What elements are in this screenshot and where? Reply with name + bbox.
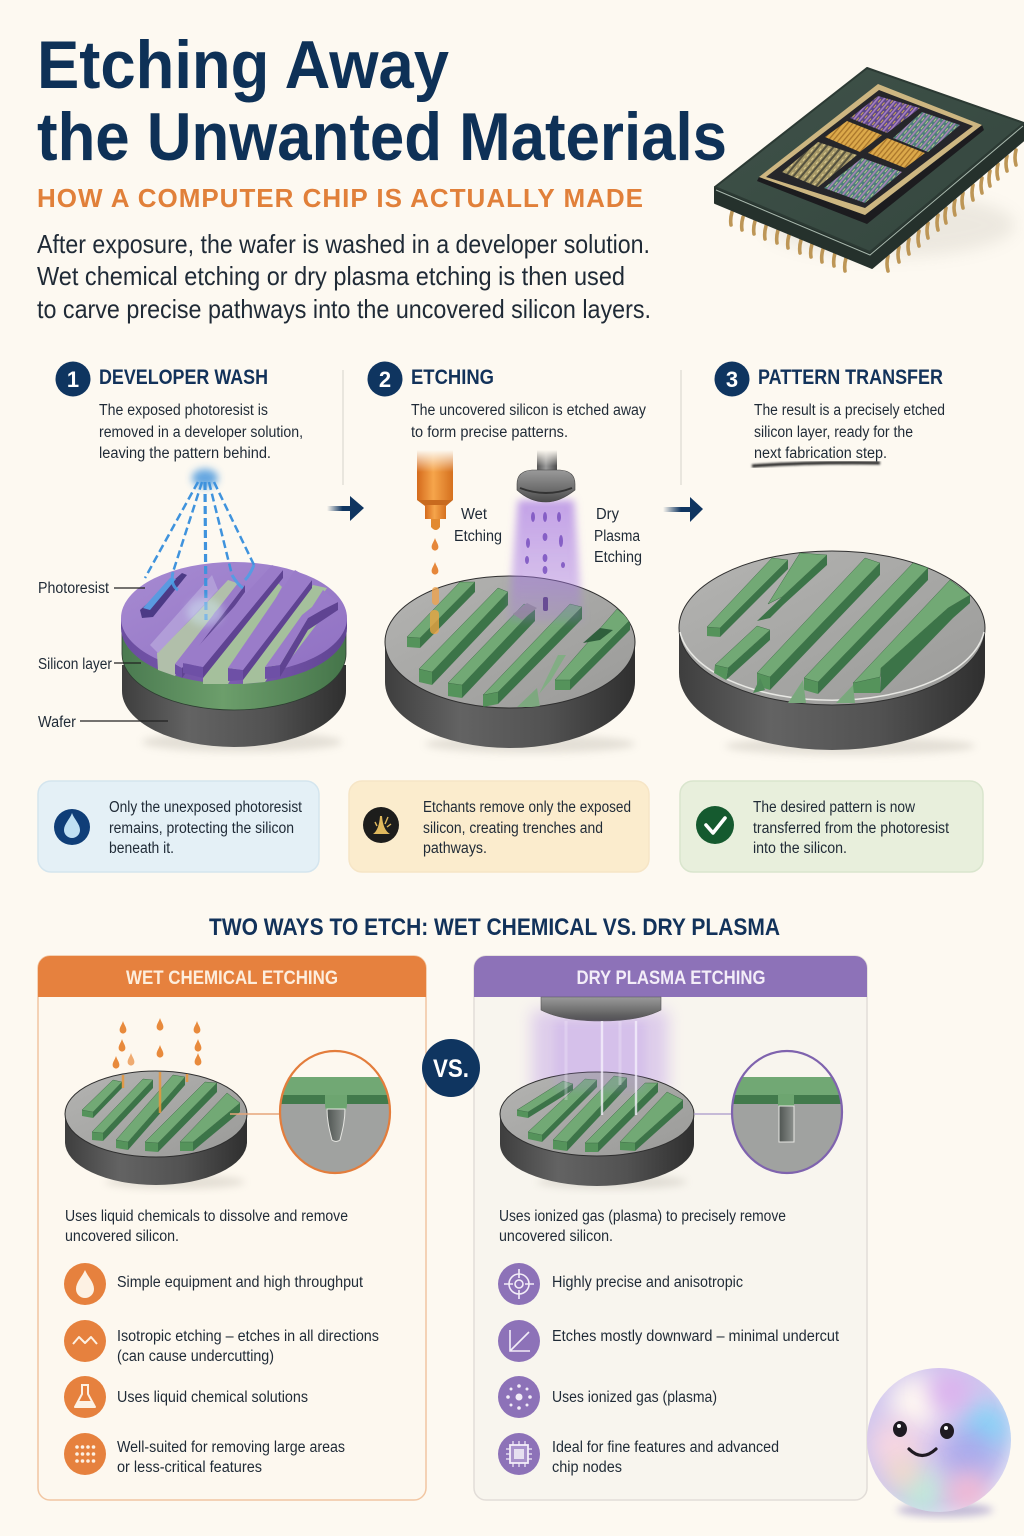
callout: etchants bbox=[349, 781, 649, 872]
step 3 number bbox=[714, 362, 750, 396]
panel: wet chemical etching bbox=[38, 956, 426, 1500]
developer spray bbox=[145, 482, 254, 620]
item: highly precise bbox=[498, 1263, 743, 1305]
callout text bbox=[423, 799, 631, 857]
silicon layer bbox=[122, 628, 346, 710]
mascot face bbox=[893, 1421, 954, 1456]
callout text: Only the unexposed photoresist bbox=[109, 799, 303, 816]
callout text: Etchants remove only the exposed bbox=[423, 799, 631, 816]
step 2 number bbox=[368, 362, 402, 396]
callout text: remains, protecting the silicon bbox=[109, 820, 294, 837]
step 1 number: 1 bbox=[67, 367, 79, 392]
intro paragraph: After exposure, the wafer is washed in a developer solution. bbox=[37, 229, 650, 259]
chip pins bbox=[731, 150, 1016, 271]
wafer base bbox=[122, 665, 346, 747]
icon: wet etching nozzle bbox=[415, 450, 455, 634]
dry panel wafer bbox=[500, 1021, 694, 1189]
green silicon bars bbox=[707, 553, 970, 703]
step 1 description: The exposed photoresist is bbox=[99, 402, 268, 419]
panel: dry plasma etching bbox=[474, 956, 867, 1500]
label: dry plasma etching: Plasma bbox=[594, 528, 640, 545]
label: dry plasma etching: Dry bbox=[596, 506, 619, 523]
wafer labels bbox=[38, 580, 168, 731]
panel header: WET CHEMICAL ETCHING bbox=[126, 968, 338, 989]
label: dry plasma etching: Etching bbox=[594, 549, 642, 566]
item: liquid chemical solutions bbox=[64, 1376, 308, 1418]
arrow: step 1 to 2 bbox=[327, 496, 364, 521]
label: wafer bbox=[38, 714, 168, 731]
label: wafer: Wafer bbox=[38, 714, 76, 731]
wet panel description bbox=[65, 1208, 348, 1245]
arrow: step 2 to 3 bbox=[663, 497, 703, 522]
label: dry plasma etching bbox=[594, 506, 642, 566]
mascot: iridescent sphere bbox=[867, 1368, 1011, 1517]
step 3 description bbox=[752, 402, 945, 466]
item: isotropic etching: Isotropic etching – etches in all directions bbox=[117, 1328, 379, 1345]
panel header bbox=[38, 956, 426, 997]
step 3 description: next fabrication step. bbox=[754, 445, 887, 462]
label: wet etching bbox=[454, 506, 502, 545]
step 2 number: 2 bbox=[379, 367, 391, 392]
comparison heading: TWO WAYS TO ETCH: WET CHEMICAL VS. DRY PLASMA bbox=[209, 914, 780, 941]
plasma head bbox=[541, 997, 661, 1021]
callout text: pathways. bbox=[423, 840, 487, 857]
step 3 description: The result is a precisely etched bbox=[754, 402, 945, 419]
wet panel description: Uses liquid chemicals to dissolve and remove bbox=[65, 1208, 348, 1225]
magnified isotropic trench bbox=[275, 1051, 395, 1179]
icon: computer chip bbox=[715, 68, 1024, 271]
photoresist stripes bbox=[150, 565, 338, 681]
intro paragraph bbox=[37, 229, 651, 324]
item: large areas: Well-suited for removing large areas bbox=[117, 1439, 345, 1456]
plasma glow bbox=[532, 1010, 668, 1095]
item: isotropic etching: (can cause undercutting) bbox=[117, 1348, 274, 1365]
exposed silicon gaps bbox=[140, 573, 327, 684]
step 3 number: 3 bbox=[726, 367, 738, 392]
item: etches downward: Etches mostly downward – minimal undercut bbox=[552, 1328, 840, 1345]
icon: water drop bbox=[54, 809, 90, 845]
green silicon bars bbox=[407, 582, 630, 707]
dry panel description: Uses ionized gas (plasma) to precisely remove bbox=[499, 1208, 786, 1225]
item: large areas: or less-critical features bbox=[117, 1459, 262, 1476]
callout text: transferred from the photoresist bbox=[753, 820, 950, 837]
item: etches downward bbox=[498, 1320, 840, 1362]
step 1 number bbox=[56, 362, 90, 396]
step 2 heading: ETCHING bbox=[411, 366, 494, 389]
callout text: The desired pattern is now bbox=[753, 799, 916, 816]
label: photoresist: Photoresist bbox=[38, 580, 110, 597]
panel header bbox=[474, 956, 867, 997]
panel header: DRY PLASMA ETCHING bbox=[576, 968, 766, 989]
item: simple equipment: Simple equipment and high throughput bbox=[117, 1274, 364, 1291]
step 1 description: removed in a developer solution, bbox=[99, 424, 303, 441]
item: liquid chemical solutions: Uses liquid chemical solutions bbox=[117, 1389, 308, 1406]
step 2 description: The uncovered silicon is etched away bbox=[411, 402, 646, 419]
icon: check mark bbox=[696, 806, 734, 844]
illustration: wafer with photoresist bbox=[121, 469, 347, 752]
title: Etching Away bbox=[37, 27, 449, 103]
item: fine features: chip nodes bbox=[552, 1459, 622, 1476]
step 3 description: silicon layer, ready for the bbox=[754, 424, 913, 441]
callout: pattern transferred bbox=[680, 781, 983, 872]
intro paragraph: to carve precise pathways into the uncovered silicon layers. bbox=[37, 294, 651, 324]
callout text: beneath it. bbox=[109, 840, 174, 857]
item: large areas bbox=[64, 1433, 345, 1476]
photoresist layer bbox=[121, 618, 347, 684]
callout text bbox=[753, 799, 950, 857]
vs badge bbox=[422, 1039, 480, 1097]
step 3: pattern transfer bbox=[714, 362, 945, 466]
wet panel description: uncovered silicon. bbox=[65, 1228, 179, 1245]
title bbox=[37, 27, 727, 175]
item: isotropic etching bbox=[64, 1320, 379, 1365]
item: ionized gas bbox=[498, 1376, 717, 1418]
illustration: finished wafer bbox=[679, 551, 985, 755]
step 2 description: to form precise patterns. bbox=[411, 424, 568, 441]
step 2 description bbox=[411, 402, 646, 441]
wet panel wafer bbox=[65, 1071, 247, 1189]
step 1 heading: DEVELOPER WASH bbox=[99, 366, 268, 389]
item: simple equipment bbox=[64, 1263, 364, 1305]
step dividers bbox=[343, 370, 681, 485]
label: wet etching: Wet bbox=[461, 506, 488, 523]
item: highly precise: Highly precise and anisotropic bbox=[552, 1274, 743, 1291]
item: fine features: Ideal for fine features and advanced bbox=[552, 1439, 779, 1456]
step 3 heading: PATTERN TRANSFER bbox=[758, 366, 943, 389]
icon: plasma head bbox=[508, 450, 583, 622]
subtitle: HOW A COMPUTER CHIP IS ACTUALLY MADE bbox=[37, 183, 643, 213]
chip circuit blocks bbox=[782, 96, 960, 203]
illustration: etching wafer bbox=[385, 450, 642, 753]
dry panel description: uncovered silicon. bbox=[499, 1228, 613, 1245]
intro paragraph: Wet chemical etching or dry plasma etching is then used bbox=[37, 261, 625, 291]
magnified anisotropic trench bbox=[730, 1050, 844, 1174]
step 1 description: leaving the pattern behind. bbox=[99, 445, 271, 462]
icon: etch spark bbox=[363, 807, 399, 843]
callout: developer bbox=[38, 781, 319, 872]
item: ionized gas: Uses ionized gas (plasma) bbox=[552, 1389, 717, 1406]
label: wet etching: Etching bbox=[454, 528, 502, 545]
title: the Unwanted Materials bbox=[37, 99, 727, 175]
callout text bbox=[109, 799, 303, 857]
step 2: etching bbox=[368, 362, 646, 441]
dry panel description bbox=[499, 1208, 786, 1245]
callout text: into the silicon. bbox=[753, 840, 847, 857]
step 1 description bbox=[99, 402, 303, 462]
vs badge: VS. bbox=[433, 1055, 469, 1083]
item: fine features bbox=[498, 1433, 779, 1476]
label: silicon layer: Silicon layer bbox=[38, 656, 112, 673]
callout text: silicon, creating trenches and bbox=[423, 820, 603, 837]
wet etchant drops bbox=[113, 1018, 201, 1069]
step 1: developer wash bbox=[56, 362, 303, 462]
